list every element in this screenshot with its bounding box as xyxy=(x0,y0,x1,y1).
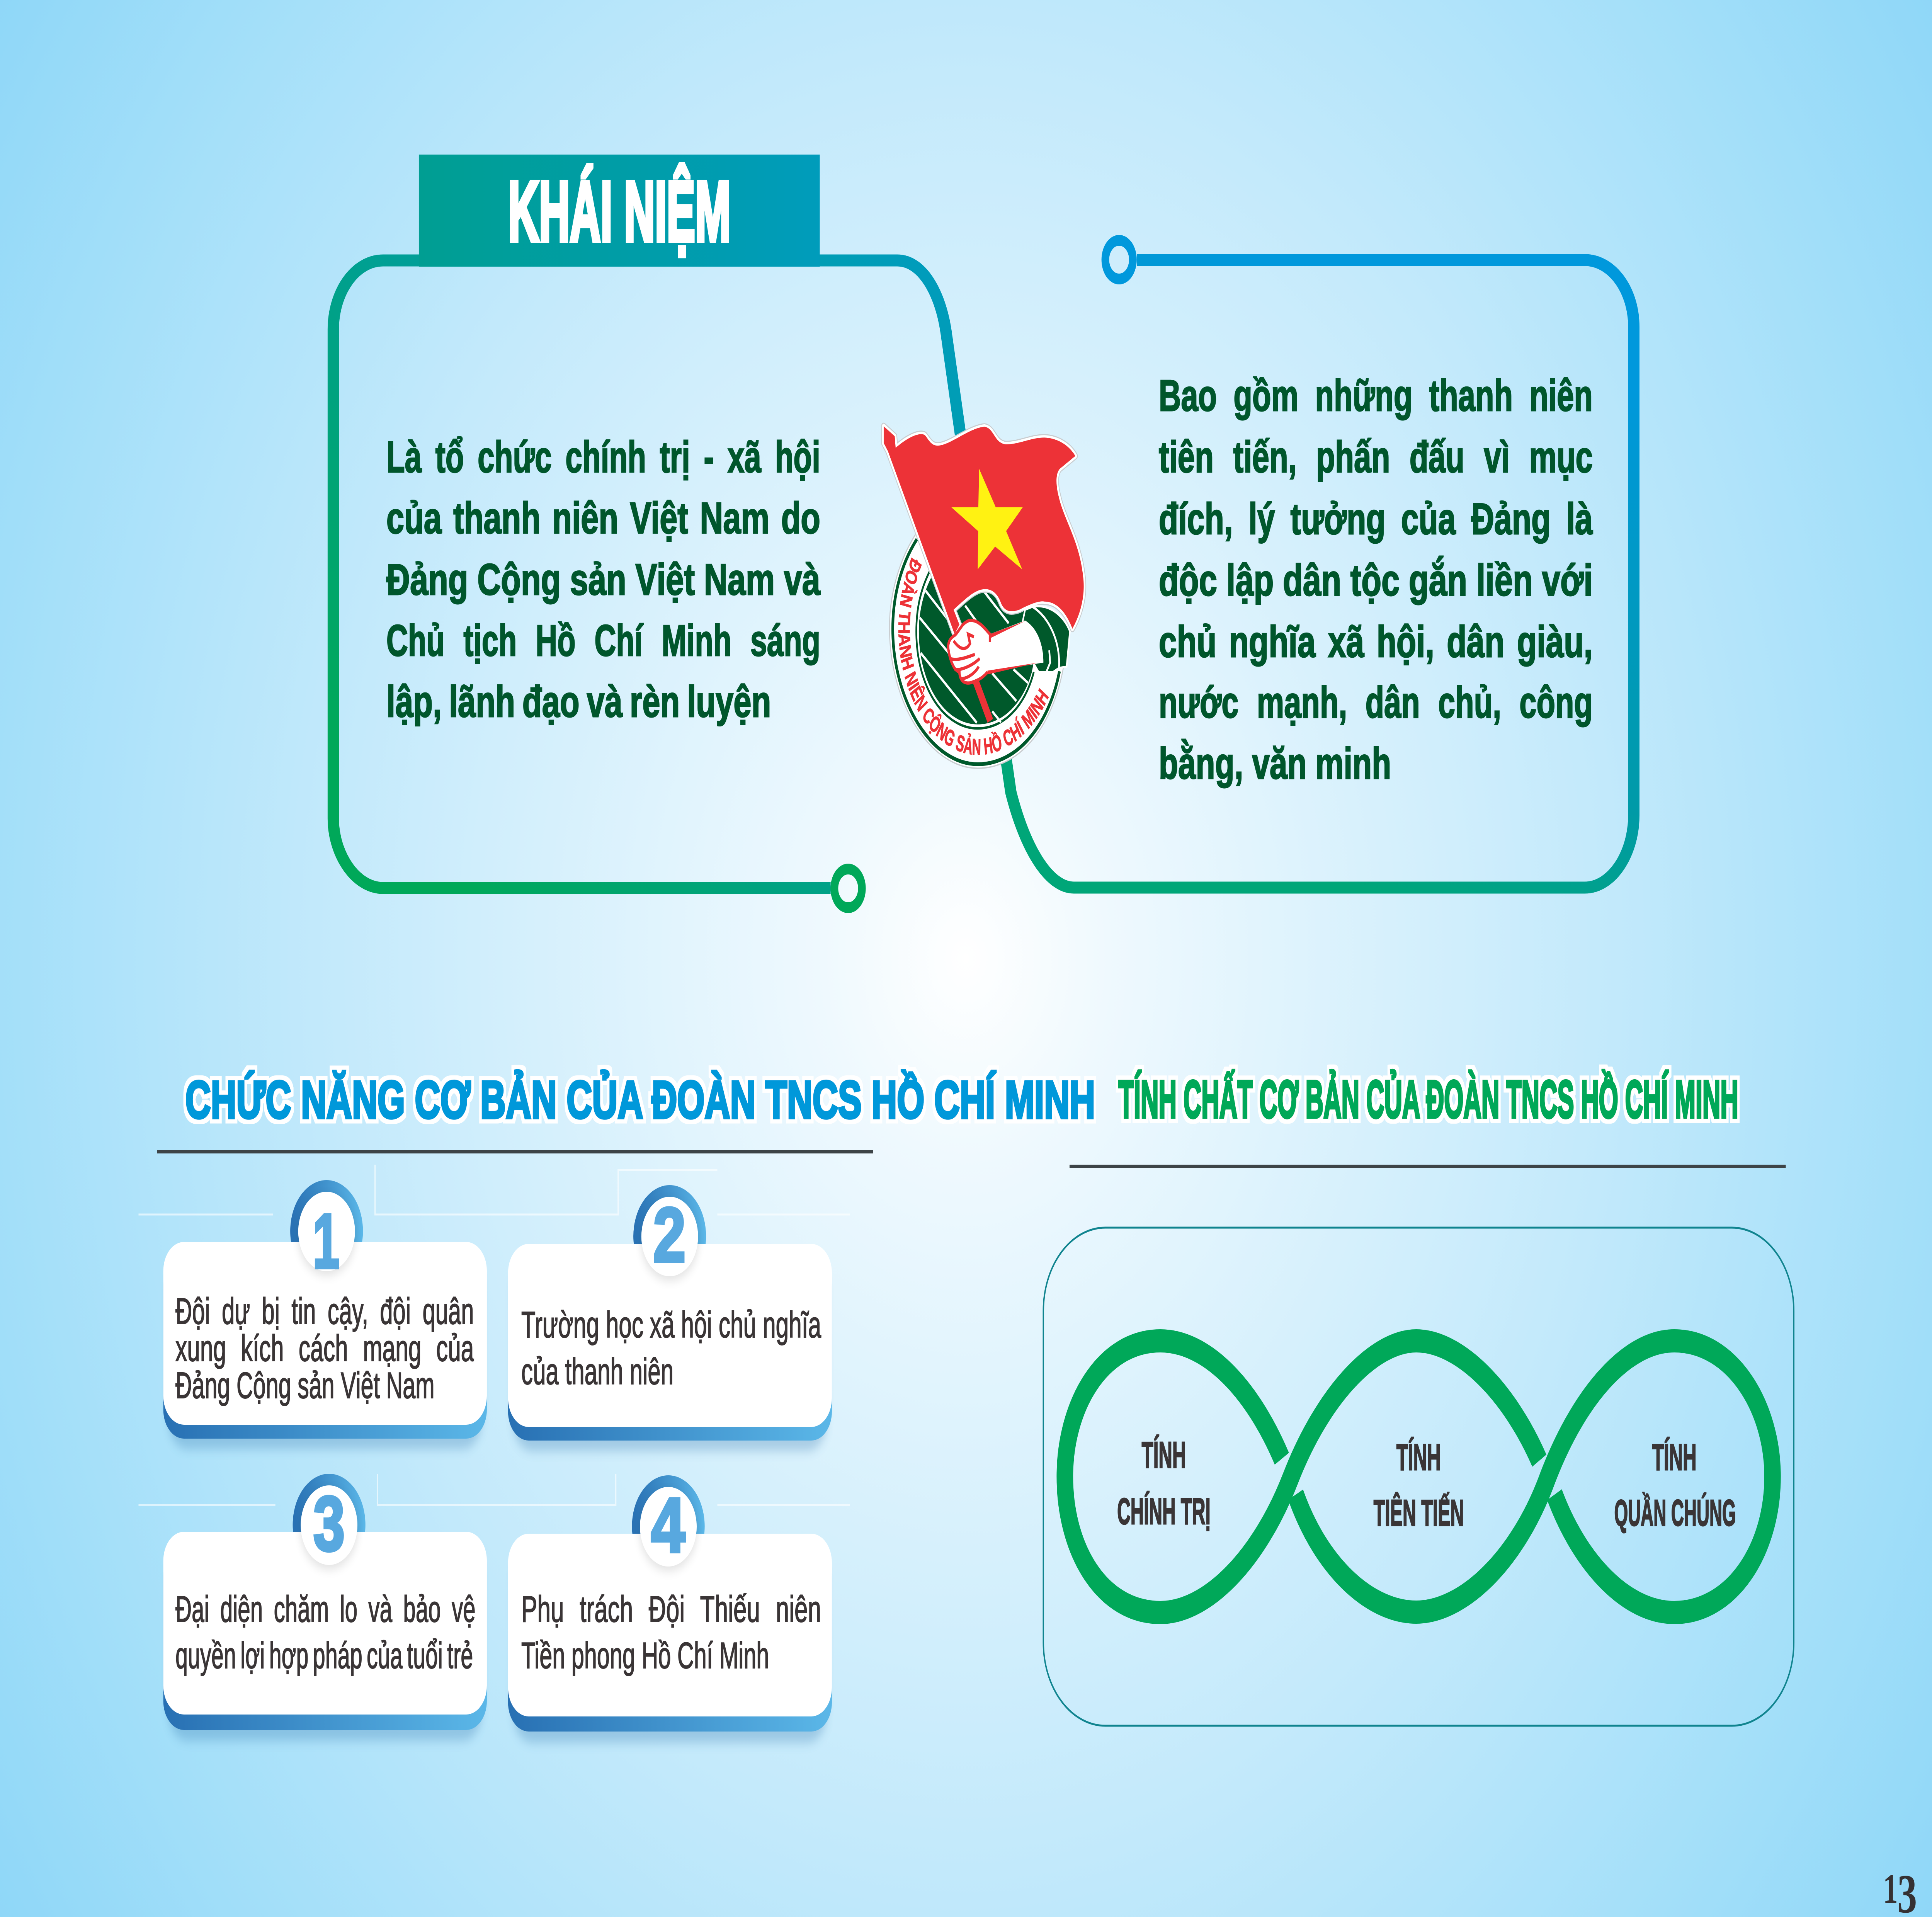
text block: right concept: tiên tiến, phấn đấu vì mục xyxy=(1159,432,1593,481)
label: advanced: TIÊN TIẾN xyxy=(1374,1492,1464,1534)
label: advanced xyxy=(1374,1437,1464,1534)
panel: right concept frame xyxy=(992,240,1634,888)
card 4 text: Phụ trách Đội Thiếu niên xyxy=(521,1589,821,1630)
card 1 text xyxy=(175,1291,474,1406)
number badge 4 ring xyxy=(632,1475,705,1577)
heading: properties: TÍNH CHẤT CƠ BẢN CỦA ĐOÀN TNCS HỒ CHÍ MINH xyxy=(1119,1070,1738,1129)
text block: left concept xyxy=(386,432,821,726)
ring end left xyxy=(834,869,862,908)
label: political xyxy=(1117,1434,1211,1532)
card 3 xyxy=(163,1474,487,1741)
number badge 2 ring xyxy=(633,1185,706,1287)
page number: 1 xyxy=(1883,1866,1898,1912)
text block: right concept: bằng, văn minh xyxy=(1159,738,1391,788)
ring end right xyxy=(1105,240,1133,279)
number badge 4: 4 xyxy=(651,1482,685,1568)
text block: right concept: độc lập dân tộc gắn liền với xyxy=(1159,555,1593,605)
label: mass: QUẦN CHÚNG xyxy=(1614,1492,1736,1534)
text block: left concept: Là tổ chức chính trị - xã hội xyxy=(386,432,820,481)
card 3 text: Đại diện chăm lo và bảo vệ xyxy=(175,1589,476,1630)
text block: right concept: chủ nghĩa xã hội, dân giàu, xyxy=(1159,617,1593,666)
number badge 2 xyxy=(641,1192,698,1280)
seal green disk xyxy=(919,557,1043,725)
label: mass: TÍNH xyxy=(1652,1437,1697,1478)
flag star xyxy=(951,469,1023,569)
sleeve lines xyxy=(1033,607,1059,672)
card 4 text xyxy=(521,1589,821,1676)
number badge 1 ring xyxy=(290,1180,363,1282)
text block: right concept: Bao gồm những thanh niên xyxy=(1159,371,1593,420)
label: mass xyxy=(1614,1437,1736,1534)
card 1 text: Đảng Cộng sản Việt Nam xyxy=(175,1365,435,1406)
card 1 xyxy=(163,1180,487,1449)
frame outline right xyxy=(992,260,1634,888)
fist outline xyxy=(948,621,990,683)
flag pole xyxy=(975,679,990,721)
number badge 3 xyxy=(301,1480,357,1569)
number badge 1: 1 xyxy=(313,1198,339,1284)
text block: left concept: Đảng Cộng sản Việt Nam và xyxy=(386,555,821,604)
number badge 2: 2 xyxy=(653,1192,686,1278)
panel: properties box xyxy=(1043,1228,1794,1726)
flag xyxy=(884,426,1084,634)
text block: left concept: Chủ tịch Hồ Chí Minh sáng xyxy=(386,616,820,665)
text block: left concept: của thanh niên Việt Nam do xyxy=(386,493,820,543)
arm red edges xyxy=(987,621,1039,675)
label: political: TÍNH xyxy=(1142,1434,1186,1476)
number badge 4 xyxy=(640,1482,697,1570)
card 2 text: Trường học xã hội chủ nghĩa xyxy=(521,1304,821,1345)
label: advanced: TÍNH xyxy=(1396,1437,1441,1478)
number badge 3 ring xyxy=(293,1474,366,1576)
infinity ribbon xyxy=(1065,1341,1772,1613)
title banner xyxy=(419,155,820,267)
card 2 text xyxy=(521,1304,821,1392)
title text: KHÁI NIỆM xyxy=(509,164,731,259)
icon: youth union emblem xyxy=(884,426,1084,768)
seal inner ring xyxy=(916,572,1034,728)
disk stripes xyxy=(920,591,1028,723)
flag outline xyxy=(884,426,1084,634)
card 2 xyxy=(508,1185,832,1451)
panel: left concept frame xyxy=(333,260,969,908)
card 4 xyxy=(508,1475,832,1743)
arm and fist xyxy=(948,621,1043,683)
card 3 text xyxy=(175,1589,476,1676)
card 2 text: của thanh niên xyxy=(521,1351,673,1392)
frame outline left xyxy=(333,260,969,888)
seal base xyxy=(889,534,1063,768)
heading: functions: CHỨC NĂNG CƠ BẢN CỦA ĐOÀN TNCS HỒ CHÍ MINH xyxy=(185,1070,1095,1129)
seal lettering: ĐOÀN THANH NIÊN CỘNG SẢN HỒ CHÍ MINH xyxy=(895,555,1052,760)
card 1 text: xung kích cách mạng của xyxy=(175,1328,474,1369)
card 4 text: Tiền phong Hồ Chí Minh xyxy=(521,1635,769,1676)
number badge 3: 3 xyxy=(313,1480,345,1567)
text block: right concept: nước mạnh, dân chủ, công xyxy=(1159,677,1593,727)
text block: right concept: đích, lý tưởng của Đảng là xyxy=(1159,494,1593,543)
sleeve xyxy=(1019,606,1070,672)
text block: left concept: lập, lãnh đạo và rèn luyện xyxy=(386,677,771,726)
label: political: CHÍNH TRỊ xyxy=(1117,1491,1211,1532)
card 1 text: Đội dự bị tin cậy, đội quân xyxy=(175,1291,474,1332)
card 3 text: quyền lợi hợp pháp của tuổi trẻ xyxy=(175,1635,473,1676)
seal outer ring xyxy=(893,539,1060,764)
number badge 1 xyxy=(298,1192,355,1284)
text block: right concept xyxy=(1159,371,1593,788)
